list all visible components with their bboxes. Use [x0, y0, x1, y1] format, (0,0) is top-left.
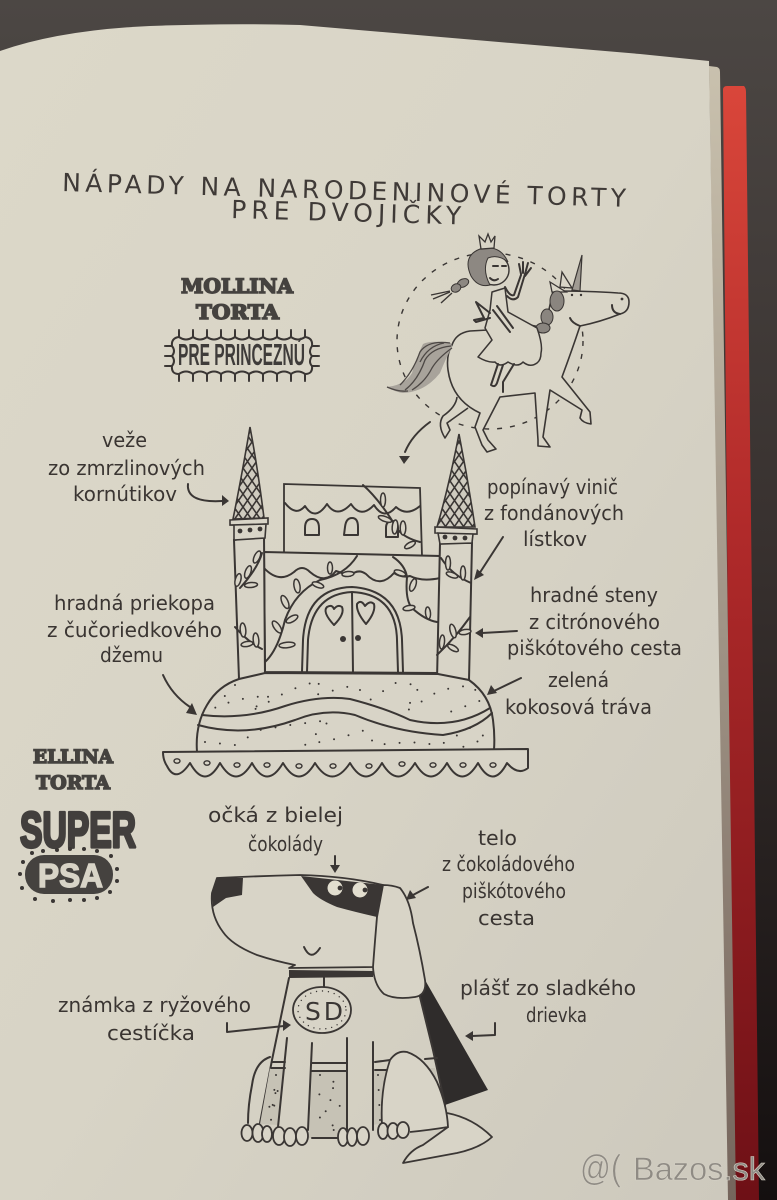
- label: body: piškótového: [462, 879, 566, 903]
- mouth and eye: [570, 305, 620, 326]
- princess arms: [493, 274, 525, 332]
- label: grass: [505, 668, 652, 719]
- hair: [468, 248, 508, 286]
- superhero dog: [212, 875, 492, 1163]
- label: grass: zelená: [548, 668, 609, 692]
- tail: [387, 342, 452, 393]
- smile: [304, 947, 320, 955]
- label: walls: hradné steny: [530, 583, 658, 607]
- unicorn body: [448, 291, 629, 452]
- braid: [431, 277, 470, 303]
- main wall: [264, 552, 440, 673]
- arrow: towers: [188, 484, 229, 506]
- mane braid: [536, 291, 564, 333]
- badge: super psa: SUPER: [20, 802, 136, 858]
- label: moat: hradná priekopa: [54, 591, 215, 615]
- label: tag: známka z ryžového: [58, 993, 251, 1017]
- label: eyes: čokolády: [248, 832, 323, 856]
- moat waves: [198, 698, 492, 735]
- unicorn with princess: [387, 234, 629, 452]
- label: cape: plášť zo sladkého: [460, 976, 636, 1000]
- arrow: unicorn to castle: [399, 422, 430, 464]
- arrow: body: [406, 887, 428, 900]
- haunch: [382, 1052, 448, 1132]
- cape: [420, 980, 488, 1105]
- label: vine: popínavý vinič: [487, 475, 618, 499]
- door knobs: [340, 636, 346, 642]
- arrow: eyes: [330, 856, 340, 873]
- door: [302, 587, 403, 673]
- badge: pre princeznú: [165, 330, 319, 381]
- label: cape: [460, 976, 636, 1027]
- arrow: tag: [227, 1020, 291, 1032]
- red book cover edge: [723, 86, 759, 1200]
- watermark: @(: [580, 1147, 621, 1188]
- upper tier: [284, 484, 422, 556]
- body outline: [260, 978, 445, 1123]
- label: tag: cestíčka: [107, 1021, 195, 1045]
- label: towers: [48, 428, 205, 506]
- door hearts: [326, 602, 374, 625]
- princess head: [479, 255, 509, 285]
- mask: [301, 876, 383, 917]
- label: eyes: očká z bielej: [208, 803, 343, 827]
- label: towers: kornútikov: [73, 482, 177, 506]
- arrow: grass: [487, 678, 521, 695]
- arrow: walls: [475, 628, 517, 638]
- label: moat: z čučoriedkového: [47, 618, 222, 642]
- hand: [519, 262, 531, 276]
- vine leaves: [234, 493, 471, 653]
- hind leg: [440, 397, 468, 438]
- superhero dog: SD: [305, 997, 343, 1026]
- label: eyes: [208, 803, 343, 856]
- heading: Mollina torta: MOLLINA: [181, 274, 293, 298]
- board rings: [174, 759, 496, 768]
- label: tag: [58, 993, 251, 1045]
- title: NÁPADY NA NARODENINOVÉ TORTY: [62, 168, 627, 213]
- collar: [289, 970, 373, 978]
- badge: pre princeznú: PRE PRINCEZNÚ: [178, 336, 305, 372]
- heading: Ellina torta: TORTA: [36, 772, 110, 794]
- windows: [305, 518, 398, 537]
- arrow: moat: [163, 675, 197, 715]
- vines: [235, 485, 471, 662]
- badge: super psa: [18, 802, 136, 903]
- label: walls: piškótového cesta: [507, 636, 682, 660]
- label: walls: z citrónového: [529, 610, 660, 634]
- right tower: [437, 543, 472, 680]
- label: body: z čokoládového: [442, 852, 575, 876]
- bow: [474, 302, 490, 322]
- heading: Ellina torta: ELLINA: [33, 746, 113, 768]
- label: towers: zo zmrzlinových: [48, 456, 205, 480]
- label: body: [442, 826, 575, 930]
- dashed circle: [397, 253, 583, 429]
- castle cake: [163, 427, 528, 776]
- tag: [293, 987, 351, 1033]
- label: body: telo: [478, 826, 517, 850]
- arrow: cape: [465, 1023, 495, 1041]
- crown: [479, 234, 495, 249]
- toes: [242, 1122, 409, 1146]
- eyes: [328, 880, 368, 898]
- label: moat: džemu: [100, 643, 163, 667]
- label: moat: [47, 591, 222, 667]
- ears and horn: [550, 272, 572, 292]
- label: body: cesta: [478, 906, 535, 930]
- label: vine: [484, 475, 624, 551]
- grass moat hill: [197, 673, 494, 752]
- tail: [403, 1113, 492, 1163]
- nose patch: [212, 878, 243, 907]
- princess dress: [478, 288, 542, 365]
- speckled belly panels: [260, 1068, 440, 1138]
- heading: Mollina torta: TORTA: [196, 300, 280, 324]
- ear: [373, 885, 425, 998]
- label: grass: kokosová tráva: [505, 695, 652, 719]
- heading: Mollina torta: [165, 274, 319, 381]
- head: [212, 875, 383, 968]
- title: PRE DVOJIČKY: [231, 194, 462, 230]
- label: towers: veže: [102, 428, 147, 452]
- heading: Ellina torta: [18, 746, 136, 903]
- back hump: [248, 1057, 270, 1123]
- label: vine: z fondánových: [484, 501, 624, 525]
- badge: super psa: PSA: [38, 857, 103, 894]
- princess legs: [491, 364, 514, 392]
- label: walls: [507, 583, 682, 660]
- leg lines: [271, 1038, 437, 1138]
- coconut speckles: [215, 680, 482, 712]
- watermark: [580, 1147, 766, 1188]
- label: cape: drievka: [526, 1003, 587, 1027]
- stacked page edges: [709, 66, 736, 1200]
- cake board: [163, 749, 528, 776]
- arrow: vine: [474, 537, 503, 580]
- label: vine: lístkov: [523, 527, 587, 551]
- watermark: Bazos.sk: [633, 1151, 766, 1187]
- left tower: [234, 535, 265, 679]
